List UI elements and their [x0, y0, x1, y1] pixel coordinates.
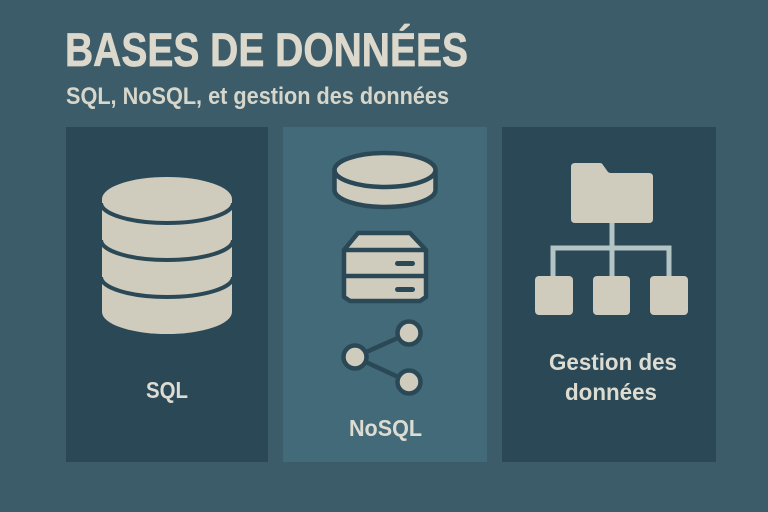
title: BASES DE DONNÉES — [65, 23, 468, 76]
panel: SQL — [66, 127, 268, 462]
icon: graph network — [344, 322, 420, 394]
icon: server storage — [344, 233, 426, 301]
label: data management: Gestion des — [549, 349, 677, 375]
panel: NoSQL — [283, 127, 487, 462]
panel: data management — [502, 127, 716, 462]
icon: folder hierarchy — [535, 163, 688, 315]
icon: disc database — [334, 153, 436, 207]
label: SQL: SQL — [146, 377, 188, 403]
label: NoSQL: NoSQL — [349, 415, 422, 441]
icon: SQL database cylinder — [101, 177, 233, 334]
label: data management — [549, 349, 677, 405]
subtitle: SQL, NoSQL, et gestion des données — [66, 83, 449, 110]
label: data management: données — [565, 379, 657, 405]
